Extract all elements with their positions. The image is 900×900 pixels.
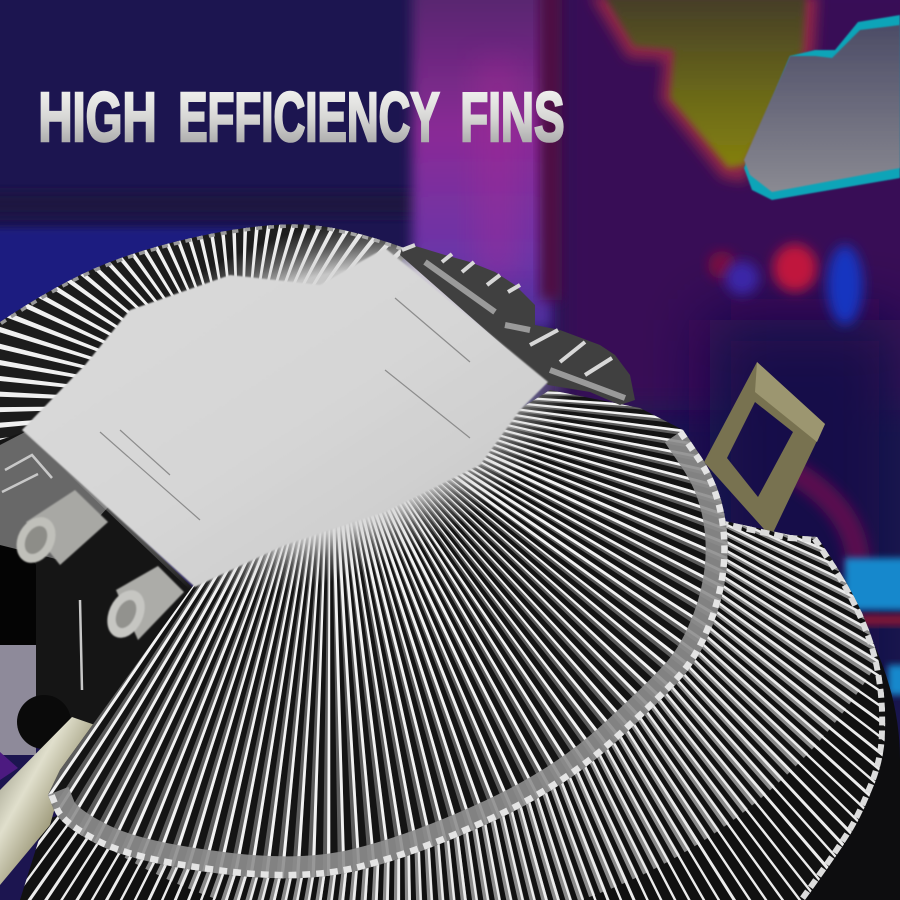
- heat pipe cap lower: [100, 566, 184, 644]
- title: HIGH: [38, 79, 157, 157]
- heat pipe cap upper: [9, 490, 108, 570]
- dark casing edge at right: [800, 640, 900, 900]
- title: FINS: [460, 79, 565, 157]
- silver heat pipe: [0, 717, 95, 885]
- olive mounting bracket: [704, 362, 825, 537]
- rear upper fin ring: [0, 224, 404, 440]
- crimped rim band: [48, 430, 728, 878]
- rear lower fin ring: [20, 521, 886, 900]
- title: EFFICIENCY: [178, 79, 440, 157]
- flat aluminium top block: [22, 248, 548, 587]
- groove lines on block: [100, 298, 470, 520]
- title: [38, 79, 565, 157]
- rear metal fin hardware: [400, 245, 635, 405]
- main upper fin disc: [48, 390, 728, 878]
- hazy white fin hub: [72, 227, 568, 590]
- heat pipe mount and black body: [0, 430, 195, 780]
